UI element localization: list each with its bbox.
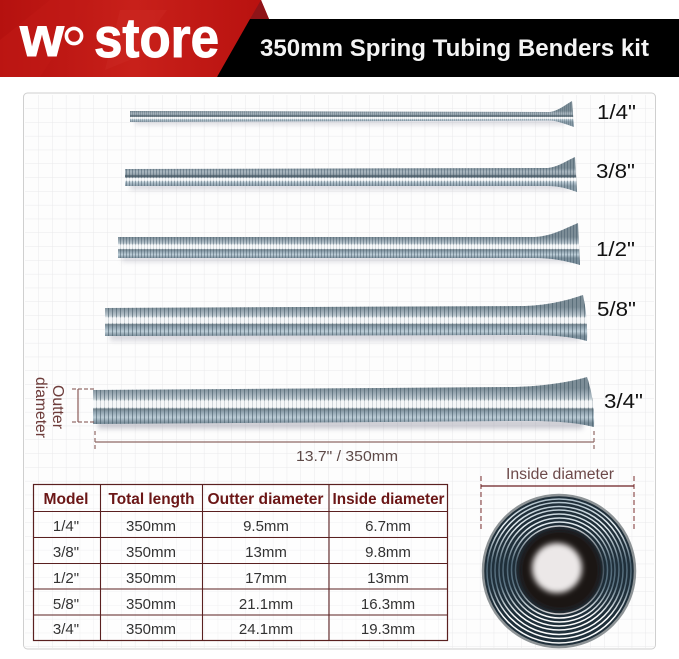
table rows: 350mm bbox=[126, 544, 176, 561]
specification table bbox=[33, 484, 448, 641]
logo: wostore: store bbox=[94, 6, 219, 69]
spring 3/8 inch bbox=[125, 157, 577, 192]
concentric coils bbox=[487, 499, 631, 643]
table rows: 13mm bbox=[367, 570, 409, 587]
table rows: 350mm bbox=[126, 570, 176, 587]
spring end view bbox=[483, 495, 635, 647]
table rows: 19.3mm bbox=[361, 621, 415, 638]
table rows: 1/2" bbox=[53, 570, 79, 587]
table header: Inside diameter bbox=[332, 491, 445, 508]
dark inner hole bbox=[519, 529, 601, 611]
spring 1/4 inch bbox=[130, 101, 574, 127]
table rows: 350mm bbox=[126, 621, 176, 638]
table rows: 9.8mm bbox=[365, 544, 411, 561]
label 5/8: 5/8" bbox=[597, 298, 636, 321]
label 1/2: 1/2" bbox=[596, 238, 635, 261]
table rows: 3/4" bbox=[53, 621, 79, 638]
logo: wostore: w bbox=[19, 5, 64, 68]
black title band bbox=[217, 19, 679, 77]
table header bbox=[44, 491, 445, 508]
logo: wostore bbox=[19, 5, 219, 69]
table rows: 16.3mm bbox=[361, 596, 415, 613]
inside diameter dimension: Inside diameter bbox=[506, 466, 614, 483]
table header: Outter diameter bbox=[208, 491, 324, 508]
spring 1/2 inch bbox=[118, 223, 580, 265]
header banner bbox=[0, 0, 679, 77]
table rows: 1/4" bbox=[53, 518, 79, 535]
table rows: 350mm bbox=[126, 596, 176, 613]
spring 5/8 inch bbox=[105, 295, 587, 341]
inside diameter dimension bbox=[481, 466, 634, 529]
table rows: 24.1mm bbox=[239, 621, 293, 638]
table rows: 350mm bbox=[126, 518, 176, 535]
outter diameter dimension: Outter bbox=[49, 385, 66, 429]
title: 350mm Spring Tubing Benders kit bbox=[260, 35, 649, 62]
table rows: 17mm bbox=[245, 570, 287, 587]
length dimension: 13.7" / 350mm bbox=[296, 449, 398, 465]
table rows bbox=[53, 518, 415, 638]
table header: Model bbox=[44, 491, 88, 508]
label 3/4: 3/4" bbox=[604, 390, 643, 413]
outter diameter dimension bbox=[32, 377, 95, 438]
table rows: 3/8" bbox=[53, 544, 79, 561]
spring 3/4 inch bbox=[93, 377, 594, 429]
table rows: 6.7mm bbox=[365, 518, 411, 535]
light centre bbox=[532, 543, 582, 593]
label 1/4: 1/4" bbox=[597, 101, 636, 124]
table header: Total length bbox=[108, 491, 194, 508]
length dimension bbox=[95, 431, 594, 465]
red logo band bbox=[0, 0, 269, 77]
table rows: 9.5mm bbox=[243, 518, 289, 535]
label 3/8: 3/8" bbox=[596, 160, 635, 183]
table rows: 5/8" bbox=[53, 596, 79, 613]
outter diameter dimension: diameter bbox=[32, 377, 49, 438]
background panel with grid bbox=[24, 93, 656, 649]
table rows: 21.1mm bbox=[239, 596, 293, 613]
table rows: 13mm bbox=[245, 544, 287, 561]
